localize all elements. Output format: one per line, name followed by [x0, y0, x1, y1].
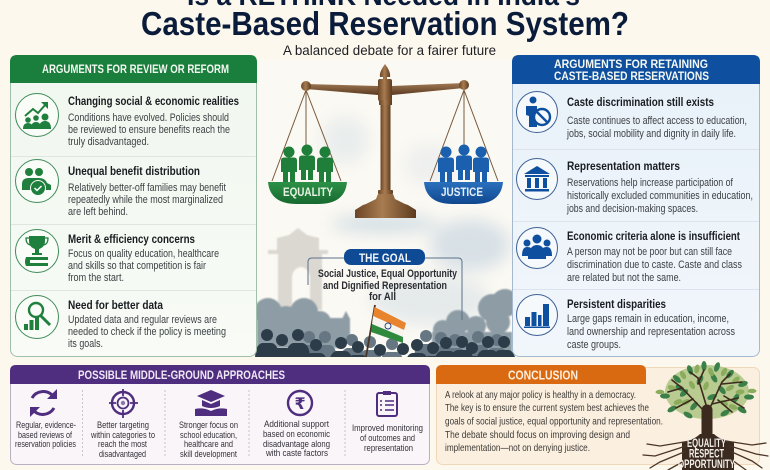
- icon: magnifier and bars: [16, 296, 58, 338]
- panel header: retaining: [512, 55, 760, 84]
- icon: people with check badge: [16, 160, 58, 202]
- item: changing realities: Conditions have evolved. Policies should: [68, 112, 229, 124]
- pan: justice: [424, 182, 503, 204]
- icon: target crosshair: [109, 389, 138, 418]
- the goal callout: and Dignified Representation: [323, 280, 447, 292]
- beam: [306, 83, 464, 95]
- tree labels: EQUALITY: [687, 438, 726, 450]
- icon: clipboard checklist: [377, 391, 397, 416]
- item: need for data: Need for better data: [68, 298, 163, 312]
- approach: improved monitoring: of outcomes and: [360, 433, 415, 443]
- panel header: conclusion: CONCLUSION: [508, 368, 578, 382]
- approach: better targeting: disadvantaged: [99, 449, 146, 459]
- item: changing realities: truly disadvantaged.: [68, 136, 149, 148]
- center illustration backdrop: [255, 115, 515, 357]
- item: economic criteria: [516, 228, 742, 284]
- approach: improved monitoring: Improved monitoring: [352, 423, 423, 433]
- icon: person with prohibition sign: [516, 92, 558, 132]
- background trees: [254, 289, 519, 352]
- panel header: retaining: CASTE-BASED RESERVATIONS: [554, 69, 709, 83]
- conclusion text: The key is to ensure the current system best achieves the: [445, 402, 649, 414]
- the goal callout: [308, 249, 462, 320]
- item: persistent disparities: Large gaps remain in education, income,: [567, 313, 729, 325]
- item: caste discrimination: jobs, social mobility and dignity in daily life.: [566, 128, 736, 140]
- item: unequal distribution: Unequal benefit distribution: [68, 164, 200, 178]
- panel: possible middle-ground approaches: [10, 365, 430, 464]
- right chains: [430, 90, 498, 181]
- crowd silhouettes, back row: [303, 330, 506, 357]
- item: need for data: Updated data and regular reviews are: [68, 314, 217, 326]
- icon: institution building: [516, 158, 558, 200]
- icon: group of people: [516, 228, 558, 268]
- figures: justice: [438, 144, 489, 182]
- approach: stronger focus on education: [179, 390, 238, 459]
- base: [355, 194, 416, 218]
- icon: indian flag: [366, 305, 406, 357]
- panel header: conclusion: [436, 365, 646, 384]
- item: need for data: needed to check if the policy is meeting: [68, 326, 226, 338]
- item: changing realities: [16, 94, 239, 148]
- item: unequal distribution: are left behind.: [68, 206, 128, 218]
- item: persistent disparities: caste groups.: [567, 339, 621, 351]
- item: caste discrimination: Caste discrimination still exists: [567, 95, 714, 109]
- approach: regular reviews: [15, 389, 76, 449]
- left chains: [272, 90, 341, 181]
- icon: trophy on books: [16, 230, 58, 272]
- crowd silhouettes, front row: [255, 329, 515, 357]
- panel: arguments for review or reform: [10, 55, 257, 356]
- approach: stronger focus on education: skill development: [180, 449, 237, 459]
- conclusion text: implementation—not on denying justice.: [445, 442, 590, 454]
- item: merit and efficiency: from the start.: [68, 272, 124, 284]
- icon: graduation cap on book: [195, 390, 227, 416]
- panel header: reform: ARGUMENTS FOR REVIEW OR REFORM: [42, 62, 229, 76]
- icon: people with rising arrow: [16, 94, 58, 136]
- approach: better targeting: Better targeting: [97, 420, 149, 430]
- item: changing realities: be reviewed to ensure benefits reach the: [68, 124, 230, 136]
- panel header: middle ground: [10, 365, 430, 384]
- icon: refresh arrows: [30, 389, 57, 417]
- subtitle: A balanced debate for a fairer future: [283, 42, 496, 58]
- panel header: middle ground: POSSIBLE MIDDLE-GROUND APPROACHES: [78, 368, 285, 382]
- finial and hub: [301, 64, 469, 194]
- balance scale: [268, 64, 503, 218]
- pillar: [380, 100, 390, 192]
- conclusion text: [445, 389, 663, 454]
- tree labels: [678, 438, 735, 470]
- item: economic criteria: A person may not be poor but can still face: [567, 246, 732, 258]
- item: persistent disparities: [516, 294, 736, 351]
- item: economic criteria: are related but not the same.: [567, 272, 681, 284]
- tree labels: RESPECT: [689, 448, 724, 460]
- approach: additional economic support: based on economic: [263, 429, 330, 439]
- panel header: reform: [10, 55, 257, 83]
- approach: regular reviews: reservation policies: [15, 439, 76, 449]
- approach: better targeting: [90, 389, 155, 459]
- approach: additional economic support: [263, 391, 330, 458]
- approach: better targeting: within categories to: [90, 430, 155, 440]
- pan: equality: EQUALITY: [283, 185, 333, 199]
- item: merit and efficiency: Merit & efficiency concerns: [68, 232, 195, 246]
- panel header: retaining: ARGUMENTS FOR RETAINING: [554, 57, 708, 71]
- item: unequal distribution: Relatively better-off families may benefit: [68, 182, 226, 194]
- conclusion text: goals of social justice, equal opportunity and representation.: [445, 416, 663, 428]
- item: merit and efficiency: [16, 230, 219, 284]
- tree trunk and branches: [668, 370, 744, 440]
- approach: stronger focus on education: healthcare and: [184, 439, 233, 449]
- pan: justice: JUSTICE: [441, 185, 483, 199]
- panel: conclusion: [436, 365, 760, 464]
- the goal callout: THE GOAL: [359, 251, 411, 265]
- figures: equality: [281, 144, 333, 182]
- item: merit and efficiency: and skills so that competition is fair: [68, 260, 206, 272]
- the goal callout: Social Justice, Equal Opportunity: [318, 268, 458, 280]
- tree illustration: [643, 361, 768, 470]
- conclusion text: The debate should focus on improving design and: [445, 429, 630, 441]
- conclusion text: A relook at any major policy is healthy in a democracy.: [445, 389, 636, 401]
- title: Caste-Based Reservation System?: [141, 5, 629, 42]
- item: representation matters: Reservations help increase participation of: [567, 177, 734, 189]
- icon: rupee coin: ₹: [294, 394, 306, 413]
- india gate: [268, 228, 328, 310]
- approach: improved monitoring: representation: [364, 443, 413, 453]
- approach: additional economic support: with caste factors: [265, 448, 328, 458]
- approach: improved monitoring: [352, 391, 423, 453]
- item: representation matters: Representation matters: [567, 159, 680, 173]
- the goal callout: for All: [369, 291, 396, 303]
- approach: regular reviews: based reviews of: [18, 430, 72, 440]
- item: unequal distribution: [16, 160, 226, 218]
- item: persistent disparities: land ownership and representation across: [567, 326, 736, 338]
- approach: stronger focus on education: Stronger focus on: [179, 420, 238, 430]
- panel: arguments for retaining reservations: [512, 55, 760, 356]
- approach: regular reviews: Regular, evidence-: [16, 420, 76, 430]
- item: changing realities: Changing social & economic realities: [68, 94, 239, 108]
- tree canopy: [656, 361, 756, 420]
- approach: additional economic support: Additional support: [264, 419, 329, 429]
- approach: stronger focus on education: school education,: [180, 430, 237, 440]
- pan: equality: [268, 182, 347, 204]
- approach: better targeting: reach the most: [98, 439, 147, 449]
- item: need for data: its goals.: [68, 338, 103, 350]
- tree roots: [643, 434, 768, 470]
- item: representation matters: [516, 158, 753, 215]
- item: persistent disparities: Persistent disparities: [567, 297, 666, 311]
- item: unequal distribution: repeatedly while the most marginalized: [68, 194, 223, 206]
- item: merit and efficiency: Focus on quality education, healthcare: [68, 248, 219, 260]
- item: need for data: [16, 296, 226, 350]
- icon: bar chart: [516, 294, 558, 336]
- approach: additional economic support: disadvantage along: [263, 439, 330, 449]
- item: representation matters: jobs and decision-making spaces.: [566, 203, 698, 215]
- item: caste discrimination: [516, 92, 747, 140]
